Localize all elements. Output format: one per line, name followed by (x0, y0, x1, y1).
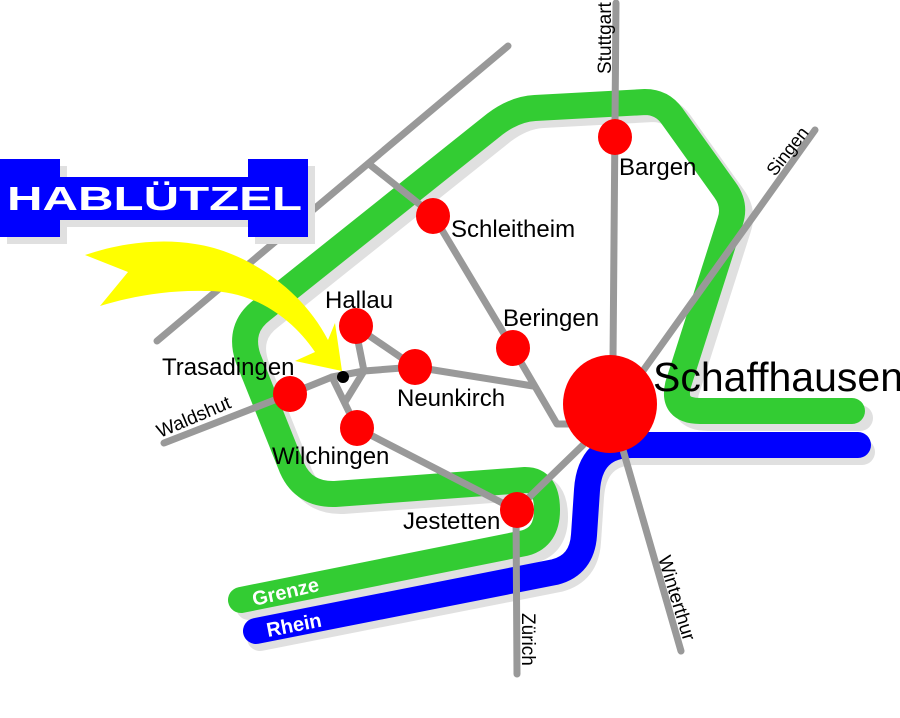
green border band: Grenze (241, 102, 852, 600)
band shadows (249, 109, 862, 638)
label: Stuttgart: Stuttgart (595, 1, 616, 74)
place labels: Neunkirch (397, 385, 505, 412)
label: Rhein: Rhein (265, 610, 323, 642)
blue river band: Rhein (256, 445, 858, 631)
logo: Hablützel (0, 159, 315, 244)
stations (273, 119, 657, 528)
label: Singen: Singen (762, 123, 813, 179)
label: Waldshut: Waldshut (154, 392, 235, 443)
place labels: Hallau (325, 287, 393, 314)
label: Schaffhausen: Schaffhausen (653, 354, 900, 400)
place labels: Jestetten (403, 508, 500, 535)
place labels: Trasadingen (162, 354, 295, 381)
place labels: Beringen (503, 305, 599, 332)
place labels: Bargen (619, 154, 696, 181)
place labels: Wilchingen (272, 443, 389, 470)
place labels (162, 154, 696, 535)
label: Zürich: Zürich (517, 613, 538, 666)
label: Winterthur: Winterthur (653, 553, 699, 644)
road network (157, 3, 815, 674)
junction dot (337, 371, 349, 383)
logo: Hablützel: HABLÜTZEL (7, 180, 302, 217)
yellow arrow (85, 241, 342, 371)
label: Grenze: Grenze (250, 574, 321, 611)
place labels: Schleitheim (451, 216, 575, 243)
